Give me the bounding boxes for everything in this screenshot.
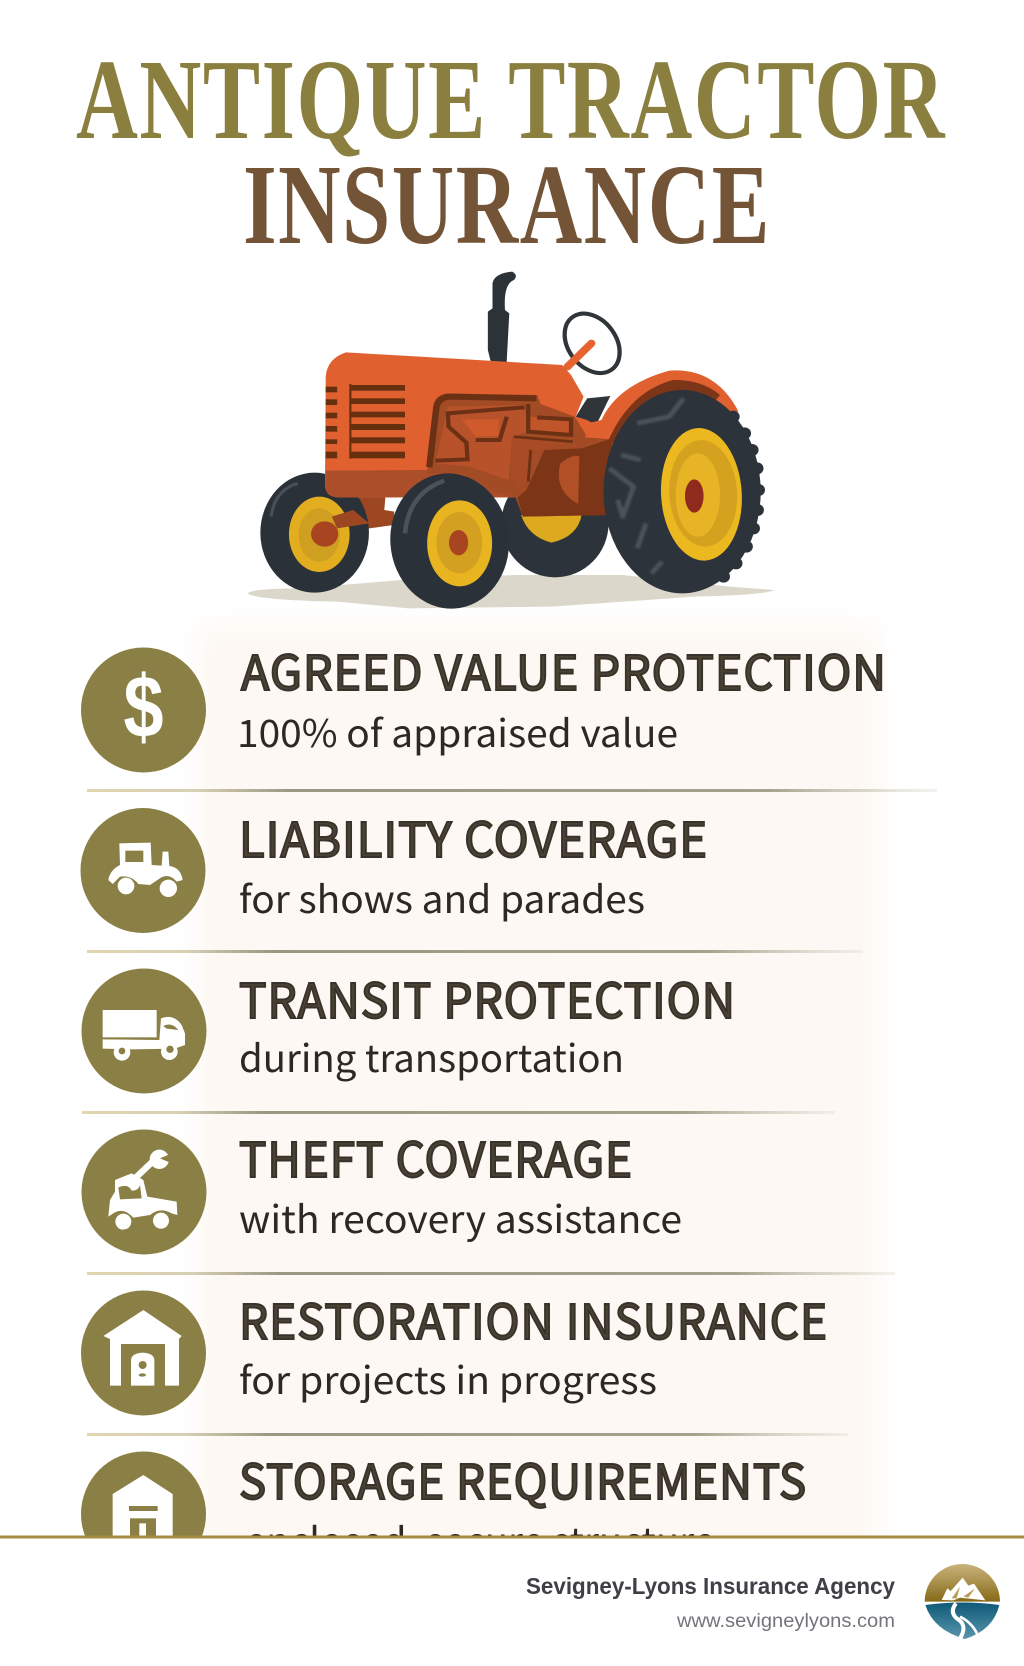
title bbox=[76, 36, 946, 268]
rear fender bbox=[585, 370, 739, 447]
heading: AGREED VALUE PROTECTION bbox=[241, 634, 887, 704]
agency name: Sevigney-Lyons Insurance Agency bbox=[526, 1573, 895, 1599]
description: 100% of appraised value bbox=[237, 703, 678, 758]
heading: STORAGE REQUIREMENTS bbox=[239, 1443, 807, 1513]
icon: storage shed bbox=[81, 1452, 206, 1576]
tractor illustration bbox=[248, 272, 775, 612]
description: during transportation bbox=[239, 1028, 624, 1083]
description: for projects in progress bbox=[239, 1350, 657, 1405]
row 2: liability coverage bbox=[80, 801, 708, 933]
description: enclosed, secure structure bbox=[245, 1511, 715, 1566]
icon: barn bbox=[81, 1290, 206, 1416]
logo bbox=[925, 1564, 1000, 1639]
website: www.sevigneylyons.com bbox=[676, 1611, 895, 1632]
cream panel background bbox=[198, 625, 878, 1575]
row 1: agreed value protection bbox=[81, 634, 887, 772]
row 6: storage requirements bbox=[81, 1443, 807, 1576]
exhaust stack bbox=[488, 272, 516, 375]
heading: THEFT COVERAGE bbox=[239, 1121, 633, 1191]
steering wheel bbox=[553, 304, 631, 382]
tractor body bbox=[325, 352, 614, 517]
icon: truck bbox=[82, 968, 206, 1094]
row 3: transit protection bbox=[82, 962, 736, 1094]
description: with recovery assistance bbox=[239, 1189, 682, 1244]
rear wheel bbox=[604, 390, 765, 593]
footer bbox=[0, 1536, 1024, 1666]
row 5: restoration insurance bbox=[81, 1283, 828, 1416]
icon: tractor bbox=[80, 808, 206, 933]
heading: TRANSIT PROTECTION bbox=[239, 962, 736, 1032]
row 4: theft coverage bbox=[82, 1121, 682, 1254]
front axle bbox=[330, 497, 394, 528]
heading: RESTORATION INSURANCE bbox=[239, 1283, 828, 1353]
front wheel bbox=[385, 470, 514, 612]
ground shadow bbox=[248, 575, 775, 608]
icon: dollar: $ bbox=[123, 658, 164, 757]
description: for shows and parades bbox=[239, 869, 645, 924]
lower hood band bbox=[325, 470, 516, 497]
icon: tow truck with wrench bbox=[82, 1130, 206, 1254]
engine block bbox=[427, 393, 614, 517]
seat bbox=[576, 396, 610, 423]
grille bbox=[326, 384, 405, 459]
heading: LIABILITY COVERAGE bbox=[239, 801, 708, 871]
far front wheel bbox=[260, 473, 369, 593]
icon: dollar bbox=[81, 648, 206, 772]
title line 2: INSURANCE bbox=[243, 141, 771, 268]
far rear wheel bbox=[501, 469, 609, 577]
